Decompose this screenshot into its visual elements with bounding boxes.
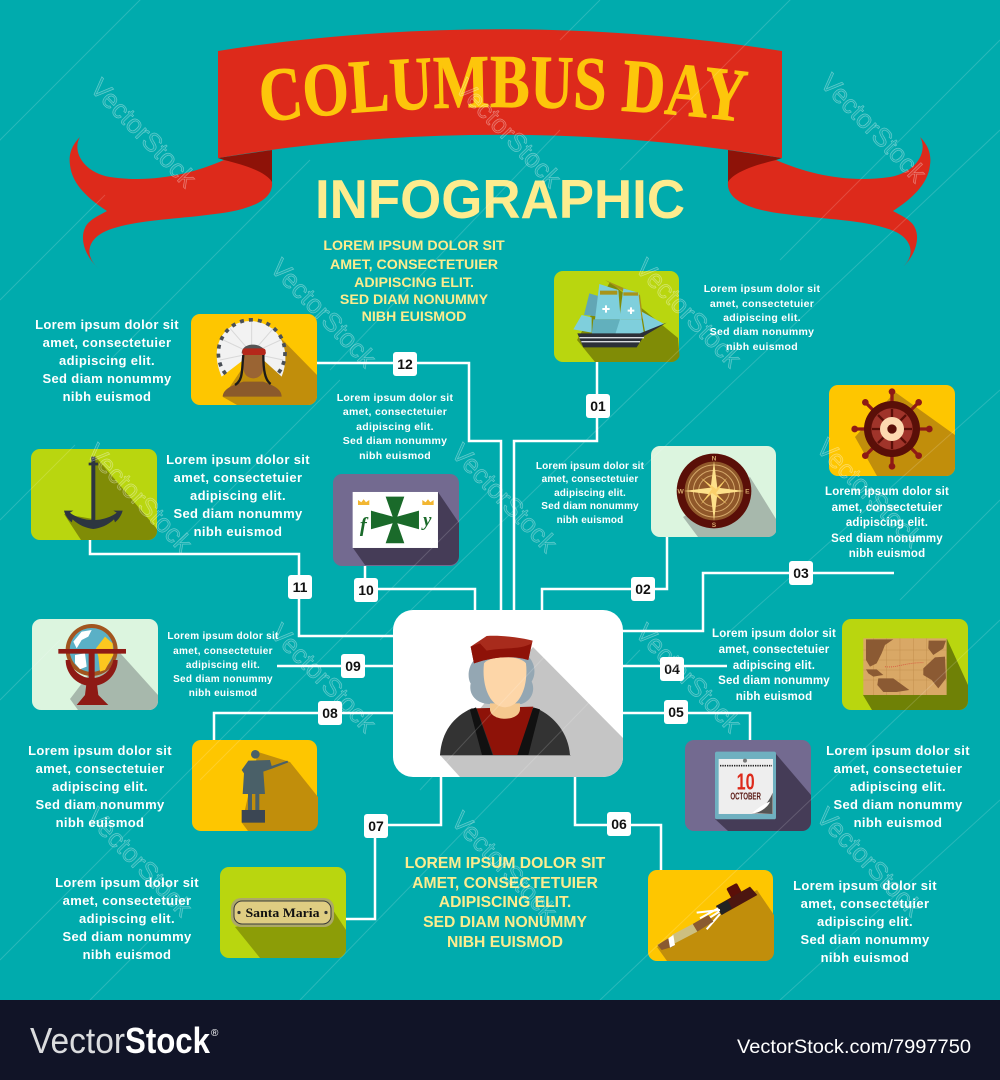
text block: 12: Sed diam nonummy bbox=[42, 371, 172, 386]
text block: 08: amet, consectetuier bbox=[36, 761, 164, 776]
number badge 10: 10 bbox=[358, 582, 374, 598]
text block: 03: Sed diam nonummy bbox=[831, 533, 943, 545]
top caption: SED DIAM NONUMMY bbox=[340, 292, 489, 308]
text block: 05: Lorem ipsum dolor sit bbox=[826, 743, 970, 758]
icon: flag: f bbox=[360, 515, 369, 537]
panel: flag bbox=[333, 474, 459, 566]
watermarks: VectorStock bbox=[629, 252, 748, 374]
bottom caption: AMET, CONSECTETUIER bbox=[412, 875, 598, 892]
number badge 03: 03 bbox=[793, 565, 809, 581]
text block: 06: nibh euismod bbox=[821, 950, 909, 965]
text block: 03: adipiscing elit. bbox=[846, 517, 928, 529]
text block: 11: Lorem ipsum dolor sit bbox=[166, 452, 310, 467]
number badge 01 bbox=[586, 394, 610, 418]
text block: 09: Lorem ipsum dolor sit bbox=[167, 631, 279, 642]
footer logo: ® bbox=[211, 1028, 219, 1039]
top caption: LOREM IPSUM DOLOR SIT bbox=[323, 238, 505, 254]
number badge 10 bbox=[354, 578, 378, 602]
panel: santa maria sign bbox=[220, 867, 346, 958]
title: COLUMBUS DAY bbox=[261, 56, 748, 121]
watermarks bbox=[80, 67, 933, 927]
panel: statue bbox=[192, 740, 318, 831]
bottom caption: LOREM IPSUM DOLOR SIT bbox=[405, 855, 606, 872]
text block: 03: Lorem ipsum dolor sit bbox=[825, 486, 949, 498]
watermarks: VectorStock bbox=[80, 801, 199, 923]
icon: ship bbox=[573, 280, 667, 347]
text block: 10: nibh euismod bbox=[359, 450, 431, 462]
icon: calendar: OCTOBER bbox=[730, 792, 761, 803]
panel: anchor bbox=[31, 449, 157, 540]
number badge 12 bbox=[393, 352, 417, 376]
number badge 07: 07 bbox=[368, 818, 384, 834]
icon: compass: E bbox=[745, 488, 750, 495]
text block: 09: amet, consectetuier bbox=[173, 646, 273, 657]
number badge 05: 05 bbox=[668, 704, 684, 720]
watermarks: VectorStock bbox=[810, 801, 929, 923]
icon: flag bbox=[353, 492, 438, 548]
text block: 10: adipiscing elit. bbox=[356, 421, 434, 433]
icon: calendar: 10 bbox=[737, 768, 755, 794]
text block: 03: nibh euismod bbox=[849, 548, 925, 560]
icon: native chief bbox=[217, 320, 285, 397]
number badge 03 bbox=[789, 561, 813, 585]
text block: 05: adipiscing elit. bbox=[850, 779, 946, 794]
text block: 07: Sed diam nonummy bbox=[62, 929, 192, 944]
watermarks: VectorStock bbox=[445, 805, 564, 927]
title bbox=[261, 56, 748, 121]
banner ribbon bbox=[70, 29, 930, 268]
panel: ship wheel bbox=[829, 385, 955, 476]
icon: compass: N bbox=[712, 455, 717, 462]
number badge 01: 01 bbox=[590, 398, 606, 414]
watermarks: VectorStock bbox=[810, 432, 929, 554]
watermarks: VectorStock bbox=[84, 72, 203, 194]
icon: sign: Santa Maria bbox=[246, 905, 320, 920]
text block: 12: nibh euismod bbox=[63, 389, 151, 404]
number badge 09: 09 bbox=[345, 658, 361, 674]
panel: central portrait bbox=[393, 610, 623, 777]
watermarks: VectorStock bbox=[629, 617, 748, 739]
number badge 04 bbox=[660, 657, 684, 681]
text block: 01: Sed diam nonummy bbox=[710, 326, 814, 338]
text block: 11: nibh euismod bbox=[194, 524, 282, 539]
text block: 06: adipiscing elit. bbox=[817, 914, 913, 929]
text block: 12: amet, consectetuier bbox=[43, 335, 171, 350]
text block: 06: Lorem ipsum dolor sit bbox=[793, 878, 937, 893]
subtitle: INFOGRAPHIC bbox=[315, 168, 685, 230]
watermarks: VectorStock bbox=[264, 252, 383, 374]
panel: ship bbox=[554, 271, 680, 362]
number badge 08 bbox=[318, 701, 342, 725]
text block: 08: Sed diam nonummy bbox=[35, 797, 165, 812]
text block: 11: amet, consectetuier bbox=[174, 470, 302, 485]
text block: 06: Sed diam nonummy bbox=[800, 932, 930, 947]
text block: 01: nibh euismod bbox=[726, 341, 798, 353]
text block: 05: Sed diam nonummy bbox=[833, 797, 963, 812]
top caption: ADIPISCING ELIT. bbox=[354, 275, 474, 291]
number badge 09 bbox=[341, 654, 365, 678]
watermarks: VectorStock bbox=[814, 67, 933, 189]
text block: 05: nibh euismod bbox=[854, 815, 942, 830]
panel: map bbox=[842, 619, 968, 710]
number badge 02 bbox=[631, 577, 655, 601]
text block: 08: adipiscing elit. bbox=[52, 779, 148, 794]
icon: compass bbox=[677, 454, 751, 529]
text block: 01: amet, consectetuier bbox=[710, 298, 814, 310]
text block: 09: nibh euismod bbox=[189, 688, 257, 699]
text block: 06: amet, consectetuier bbox=[801, 896, 929, 911]
number badge 06: 06 bbox=[611, 816, 627, 832]
icon: peace pipe bbox=[657, 883, 757, 950]
text block: 08: Lorem ipsum dolor sit bbox=[28, 743, 172, 758]
number badge 12: 12 bbox=[397, 356, 413, 372]
text block: 04: Lorem ipsum dolor sit bbox=[712, 628, 836, 640]
top caption: NIBH EUISMOD bbox=[362, 309, 466, 325]
text block: 10: Sed diam nonummy bbox=[343, 435, 447, 447]
text block: 01: Lorem ipsum dolor sit bbox=[704, 283, 820, 295]
watermarks: VectorStock bbox=[449, 72, 568, 194]
text block: 02: amet, consectetuier bbox=[542, 474, 638, 485]
footer logo: Vector bbox=[30, 1020, 125, 1061]
footer logo: Stock bbox=[125, 1020, 211, 1061]
text block: 01: adipiscing elit. bbox=[723, 312, 801, 324]
panel: calendar bbox=[685, 740, 811, 831]
text block: 11: Sed diam nonummy bbox=[173, 506, 303, 521]
bottom caption: NIBH EUISMOD bbox=[447, 934, 563, 951]
footer logo bbox=[30, 1020, 219, 1061]
icon: flag: y bbox=[421, 510, 432, 531]
text block: 09: adipiscing elit. bbox=[186, 660, 260, 671]
watermarks: VectorStock bbox=[80, 437, 199, 559]
number badge 02: 02 bbox=[635, 581, 651, 597]
text block: 02: Sed diam nonummy bbox=[541, 501, 639, 512]
text block: 02: nibh euismod bbox=[557, 515, 623, 526]
top caption: AMET, CONSECTETUIER bbox=[330, 257, 498, 273]
icon: ship wheel bbox=[851, 388, 933, 470]
text block: 10: Lorem ipsum dolor sit bbox=[337, 392, 453, 404]
text block: 09: Sed diam nonummy bbox=[173, 674, 273, 685]
icon: globe bbox=[58, 624, 126, 705]
text block: 07: amet, consectetuier bbox=[63, 893, 191, 908]
text block: 03: amet, consectetuier bbox=[832, 502, 943, 514]
text block: 12: adipiscing elit. bbox=[59, 353, 155, 368]
panel: chief bbox=[191, 314, 317, 405]
icon: map bbox=[863, 638, 947, 695]
icon: anchor bbox=[64, 457, 123, 529]
icon: columbus portrait bbox=[440, 636, 571, 755]
number badge 11: 11 bbox=[293, 579, 308, 595]
bottom caption: SED DIAM NONUMMY bbox=[423, 914, 587, 931]
text block: 11: adipiscing elit. bbox=[190, 488, 286, 503]
text block: 02: adipiscing elit. bbox=[554, 488, 626, 499]
number badge 04: 04 bbox=[664, 661, 680, 677]
number badge 11 bbox=[288, 575, 312, 599]
footer url: VectorStock.com/7997750 bbox=[737, 1037, 971, 1058]
text block: 04: Sed diam nonummy bbox=[718, 675, 830, 687]
text block: 04: amet, consectetuier bbox=[719, 644, 830, 656]
number badge 07 bbox=[364, 814, 388, 838]
number badge 08: 08 bbox=[322, 705, 338, 721]
text block: 10: amet, consectetuier bbox=[343, 406, 447, 418]
panel: globe bbox=[32, 619, 158, 710]
watermarks: VectorStock bbox=[264, 617, 383, 739]
panel: pipe bbox=[648, 870, 774, 961]
number badge 05 bbox=[664, 700, 688, 724]
icon: compass: S bbox=[712, 522, 717, 529]
text block: 05: amet, consectetuier bbox=[834, 761, 962, 776]
bottom caption: ADIPISCING ELIT. bbox=[439, 894, 571, 911]
watermarks: VectorStock bbox=[445, 437, 564, 559]
icon: compass: W bbox=[678, 488, 685, 495]
connector lines bbox=[90, 362, 894, 919]
icon: calendar bbox=[715, 752, 776, 819]
text block: 12: Lorem ipsum dolor sit bbox=[35, 317, 179, 332]
text block: 08: nibh euismod bbox=[56, 815, 144, 830]
text block: 07: nibh euismod bbox=[83, 947, 171, 962]
text block: 02: Lorem ipsum dolor sit bbox=[536, 461, 645, 472]
number badge 06 bbox=[607, 812, 631, 836]
panel: compass bbox=[651, 446, 776, 537]
text block: 07: Lorem ipsum dolor sit bbox=[55, 875, 199, 890]
text block: 07: adipiscing elit. bbox=[79, 911, 175, 926]
footer bar bbox=[0, 1000, 1000, 1080]
icon: statue bbox=[242, 750, 288, 823]
text block: 04: nibh euismod bbox=[736, 691, 812, 703]
text block: 04: adipiscing elit. bbox=[733, 660, 815, 672]
